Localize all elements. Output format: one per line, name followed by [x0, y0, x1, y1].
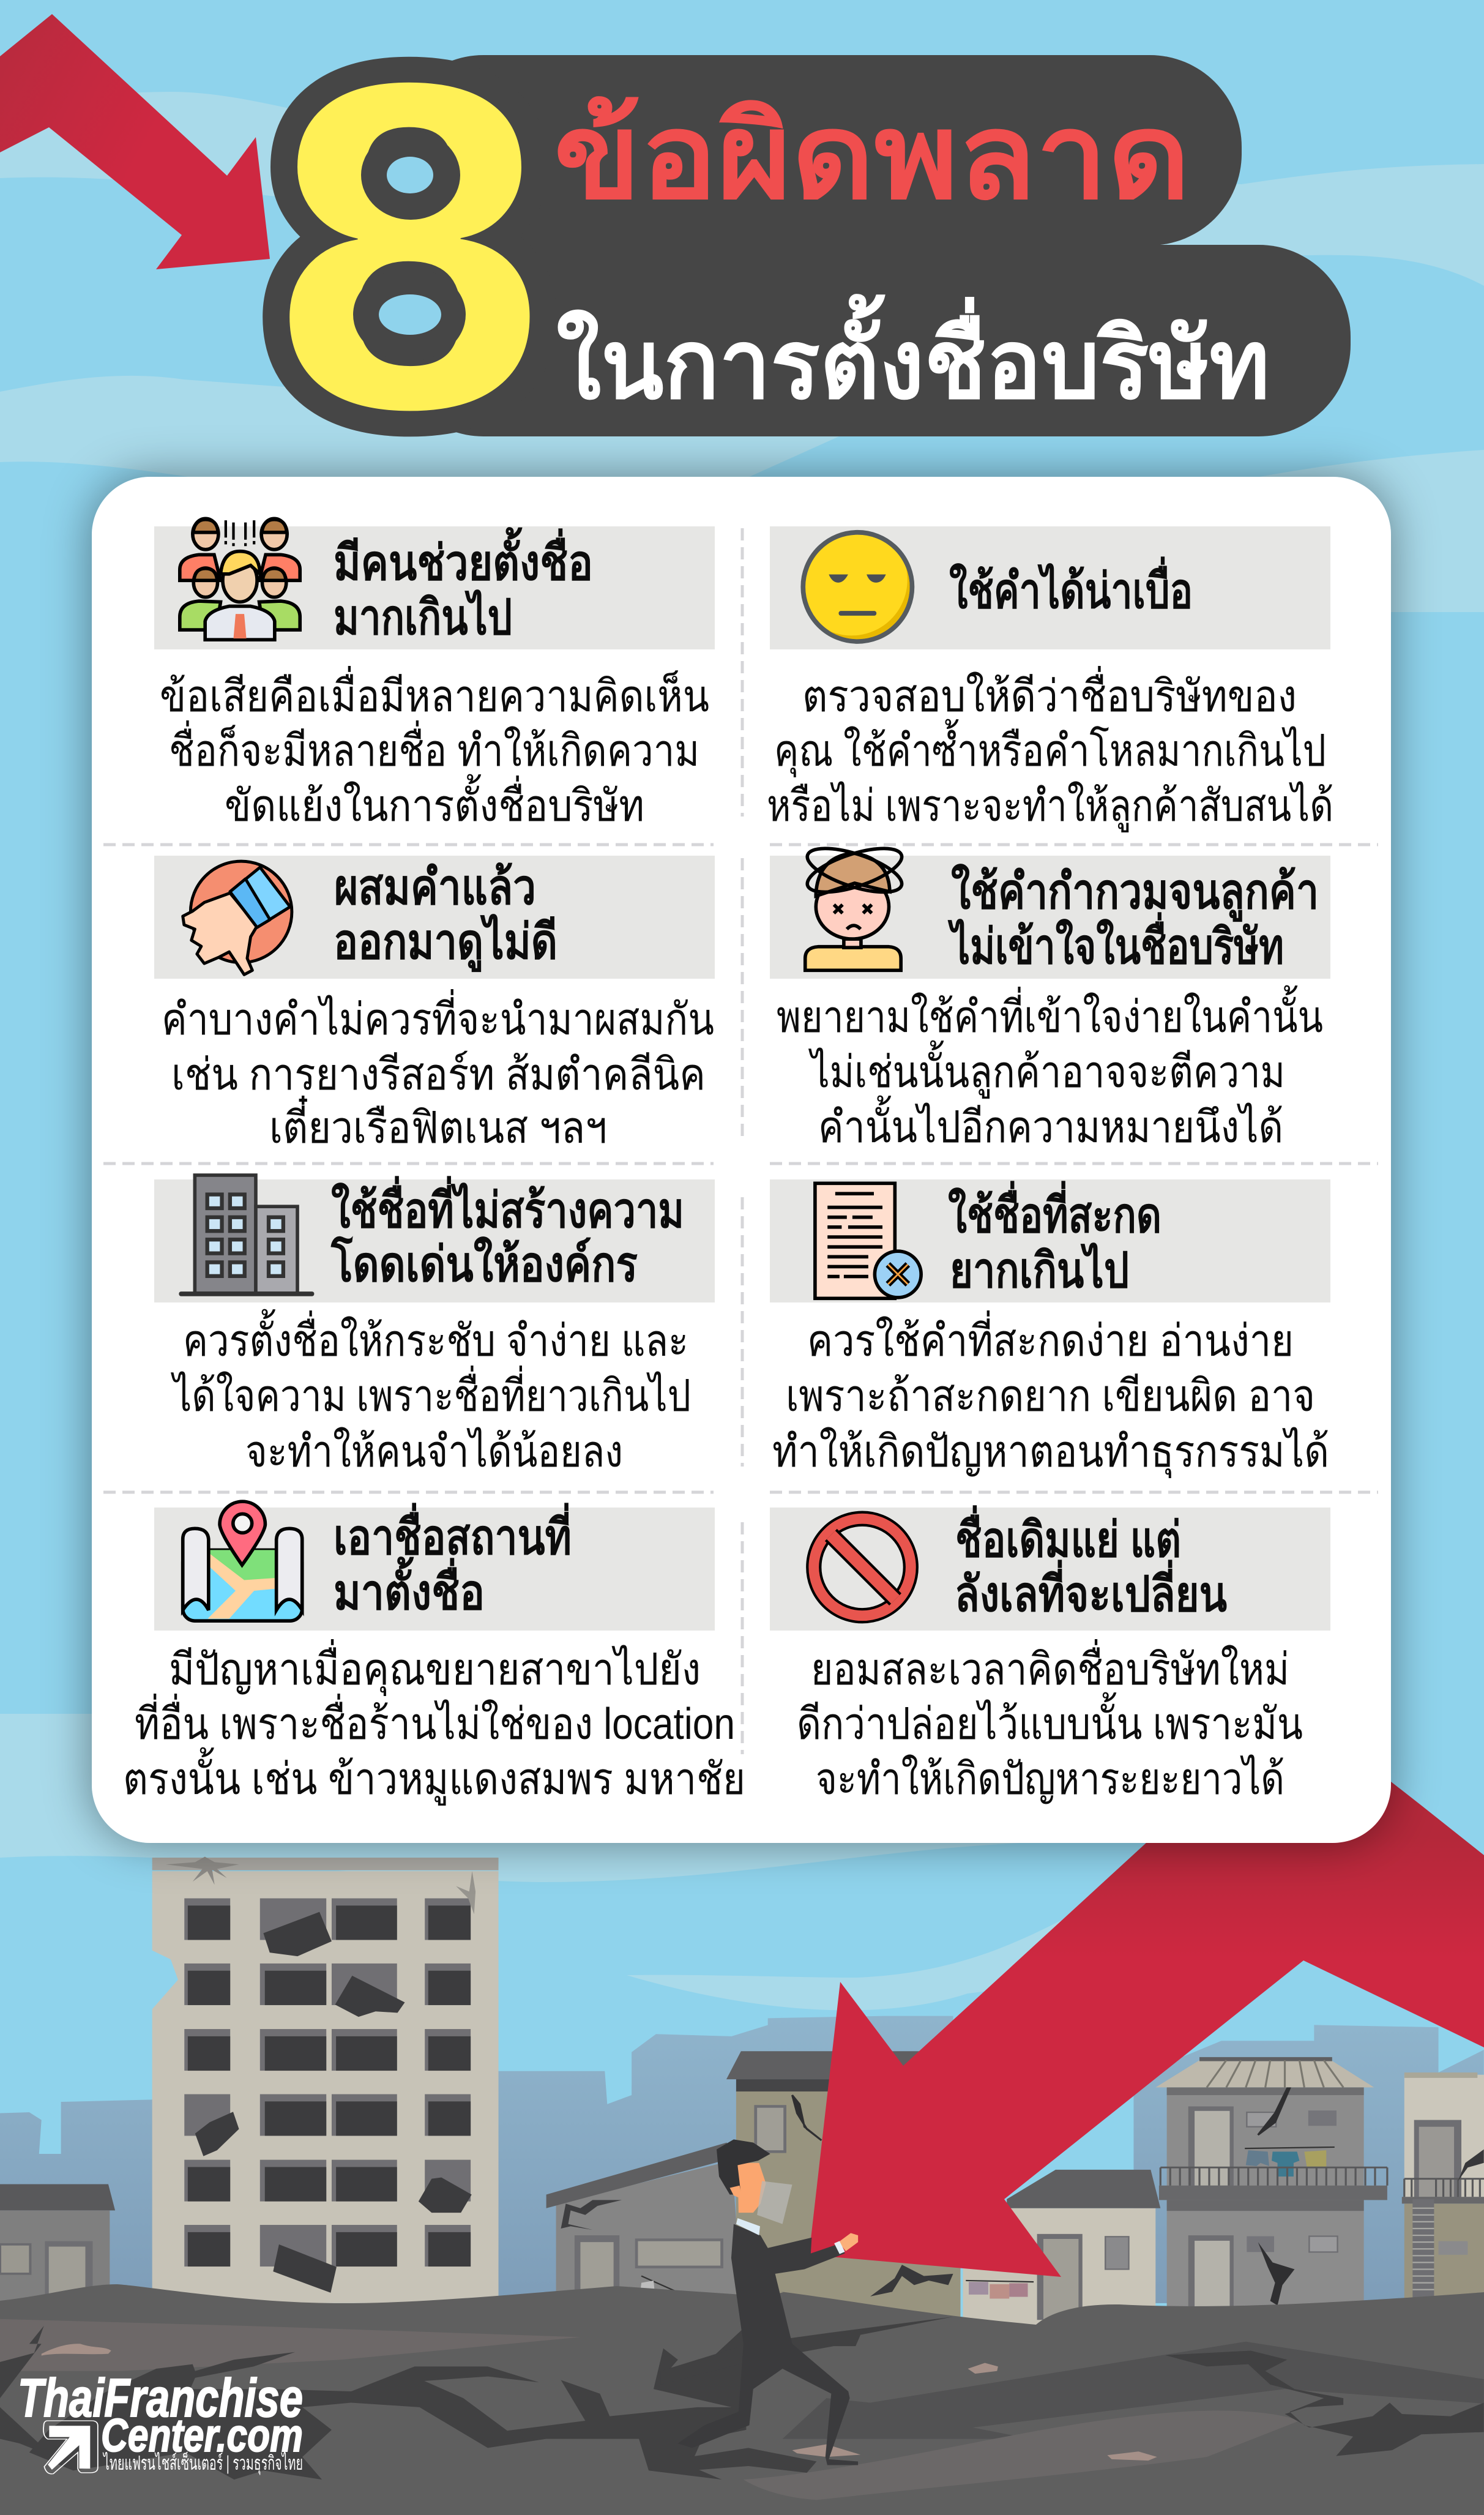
- background buildings left: [0, 1857, 744, 2321]
- clouds: [0, 67, 1484, 2010]
- number 8: 8: [274, 0, 545, 505]
- body text: ขัดแย้งในการตั้งชื่อบริษัท: [225, 774, 644, 831]
- top red arrow: [0, 14, 270, 269]
- header bar: [770, 526, 1330, 649]
- body text: ได้ใจความ เพราะชื่อที่ยาวเกินไป: [171, 1366, 691, 1421]
- title block: [274, 0, 1351, 505]
- heading: ออกมาดูไม่ดี: [334, 913, 557, 973]
- panel: hard spelling: [770, 1179, 1330, 1478]
- panel: ambiguous words: [770, 840, 1330, 1152]
- icon: rejected document: [815, 1183, 921, 1298]
- cream house: [963, 2170, 1160, 2326]
- body text: ข้อเสียคือเมื่อมีหลายความคิดเห็น: [160, 666, 709, 721]
- heading: ลังเลที่จะเปลี่ยน: [955, 1560, 1227, 1621]
- icon: thumbs down: [183, 861, 292, 974]
- body text: [767, 666, 1333, 832]
- panel: too many people naming: [154, 518, 715, 831]
- body text: พยายามใช้คำที่เข้าใจง่ายในคำนั้น: [777, 985, 1323, 1042]
- header bar: [770, 856, 1330, 979]
- panel: unremarkable name: [154, 1175, 715, 1476]
- man bag: [757, 2181, 792, 2224]
- background skyline silhouette: [0, 2018, 805, 2303]
- header bar: [770, 1179, 1330, 1302]
- body text: คำนั้นไปอีกความหมายนึงได้: [818, 1095, 1283, 1152]
- ground: [0, 2284, 1484, 2515]
- heading: มาตั้งชื่อ: [334, 1556, 485, 1620]
- header bar: [770, 1508, 1330, 1631]
- heading: ใช้คำกำกวมจนลูกค้า: [951, 863, 1319, 922]
- body text: เตี๋ยวเรือฟิตเนส ฯลฯ: [269, 1095, 607, 1153]
- main white card: [92, 477, 1391, 1843]
- header bar: [154, 856, 715, 979]
- man hand: [838, 2233, 858, 2251]
- icon: crowd: [180, 518, 300, 640]
- heading: [334, 860, 557, 973]
- header bar: [154, 1508, 715, 1631]
- title dark pill bottom: [392, 245, 1351, 436]
- panel: bad word mix: [154, 856, 715, 1153]
- heading: เอาชื่อสถานที่: [334, 1503, 572, 1564]
- number 8 counters: [353, 130, 466, 361]
- body text: หรือไม่ เพราะจะทำให้ลูกค้าสับสนได้: [767, 781, 1333, 832]
- beige house behind arrow: [726, 2051, 961, 2321]
- heading: [947, 863, 1319, 974]
- heading: มีคนช่วยตั้งชื่อ: [334, 527, 593, 590]
- heading: ผสมคำแล้ว: [334, 860, 536, 914]
- row dividers: [103, 845, 1378, 1492]
- heading: ใช้ชื่อที่สะกด: [948, 1181, 1161, 1243]
- number 8 holes: [379, 157, 441, 335]
- ground cracks: [0, 2317, 1484, 2479]
- man in suit: [677, 2139, 858, 2465]
- body text: ตรงนั้น เช่น ข้าวหมูแดงสมพร มหาชัย: [123, 1747, 745, 1806]
- heading: [330, 1176, 684, 1291]
- body text: [797, 1639, 1303, 1804]
- body text: เพราะถ้าสะกดยาก เขียนผิด อาจ: [786, 1372, 1315, 1421]
- body text: ดีกว่าปล่อยไว้แบบนั้น เพราะมัน: [797, 1692, 1303, 1749]
- heading: ไม่เข้าใจในชื่อบริษัท: [947, 912, 1284, 974]
- body text: ทำให้เกิดปัญหาตอนทำธุรกรรมได้: [772, 1427, 1329, 1478]
- heading: [948, 1181, 1161, 1298]
- icon: bored face: [803, 533, 912, 641]
- background buildings right: [726, 2051, 1484, 2326]
- body text: มีปัญหาเมื่อคุณขยายสาขาไปยัง: [169, 1639, 701, 1696]
- body text: จะทำให้เกิดปัญหาระยะยาวได้: [816, 1754, 1285, 1804]
- body text: [160, 666, 709, 831]
- title line two: ในการตั้งชื่อบริษัท: [556, 294, 1270, 419]
- panel: location name: [123, 1501, 745, 1806]
- heading: มากเกินไป: [334, 589, 512, 645]
- heading: ใช้ชื่อที่ไม่สร้างความ: [331, 1176, 684, 1238]
- logo tagline: ไทยแฟรนไชส์เซ็นเตอร์ | รวมธุรกิจไทย: [102, 2451, 303, 2475]
- icon: office buildings: [179, 1175, 314, 1296]
- body text: ควรตั้งชื่อให้กระชับ จำง่าย และ: [183, 1309, 688, 1366]
- body text: [772, 1310, 1329, 1478]
- body text: ยอมสละเวลาคิดชื่อบริษัทใหม่: [811, 1639, 1289, 1694]
- body text: [123, 1639, 745, 1806]
- title line one: ข้อผิดพลาด: [554, 90, 1190, 223]
- body text: [171, 1309, 691, 1476]
- icon: map pin: [183, 1501, 302, 1621]
- body text: จะทำให้คนจำได้น้อยลง: [245, 1427, 623, 1476]
- header bar: [154, 526, 715, 649]
- body text: [777, 985, 1323, 1152]
- logo wordmark second line: Center.com: [101, 2410, 303, 2462]
- shed: [546, 2143, 744, 2321]
- heading: ยากเกินไป: [950, 1242, 1129, 1298]
- body text: ตรวจสอบให้ดีว่าชื่อบริษัทของ: [802, 666, 1297, 721]
- ground strata: [0, 2319, 580, 2371]
- icon: prohibited sign: [814, 1519, 911, 1616]
- heading: ชื่อเดิมแย่ แต่: [955, 1505, 1181, 1567]
- heading: ใช้คำได้น่าเบื่อ: [949, 556, 1193, 618]
- body text: ชื่อก็จะมีหลายชื่อ ทำให้เกิดความ: [169, 720, 699, 775]
- body text: ไม่เช่นนั้นลูกค้าอาจจะตีความ: [808, 1040, 1285, 1099]
- damaged tower: [152, 1857, 499, 2303]
- icon: dizzy person: [802, 840, 906, 970]
- column divider: [740, 528, 744, 1754]
- man head: [737, 2163, 766, 2213]
- heading: [955, 1505, 1227, 1621]
- logo: [18, 2367, 303, 2475]
- man body: [677, 2224, 858, 2465]
- big red arrow: [809, 1706, 1484, 2277]
- left house: [0, 2184, 115, 2301]
- man hair: [717, 2139, 770, 2195]
- heading: [334, 527, 593, 645]
- logo wordmark: ThaiFranchise: [18, 2367, 303, 2428]
- body text: คำบางคำไม่ควรที่จะนำมาผสมกัน: [162, 989, 714, 1044]
- logo arrow badge: [43, 2421, 98, 2474]
- body text: คุณ ใช้คำซ้ำหรือคำโหลมากเกินไป: [774, 719, 1326, 777]
- man shirt collar: [736, 2218, 760, 2235]
- panel: bad old name: [770, 1505, 1330, 1804]
- body text: เช่น การยางรีสอร์ท ส้มตำคลีนิค: [171, 1050, 706, 1099]
- panel: boring words: [767, 526, 1333, 832]
- title dark pill top: [392, 55, 1242, 245]
- body text: [162, 989, 714, 1153]
- heading: [334, 1503, 572, 1620]
- header bar: [154, 1179, 715, 1302]
- grey two storey house: [1155, 2057, 1387, 2311]
- body text: ควรใช้คำที่สะกดง่าย อ่านง่าย: [807, 1310, 1294, 1366]
- body text: ที่อื่น เพราะชื่อร้านไม่ใช่ของ location: [135, 1694, 735, 1749]
- right edge house: [1402, 2072, 1484, 2301]
- heading: โดดเด่นให้องค์กร: [330, 1235, 638, 1291]
